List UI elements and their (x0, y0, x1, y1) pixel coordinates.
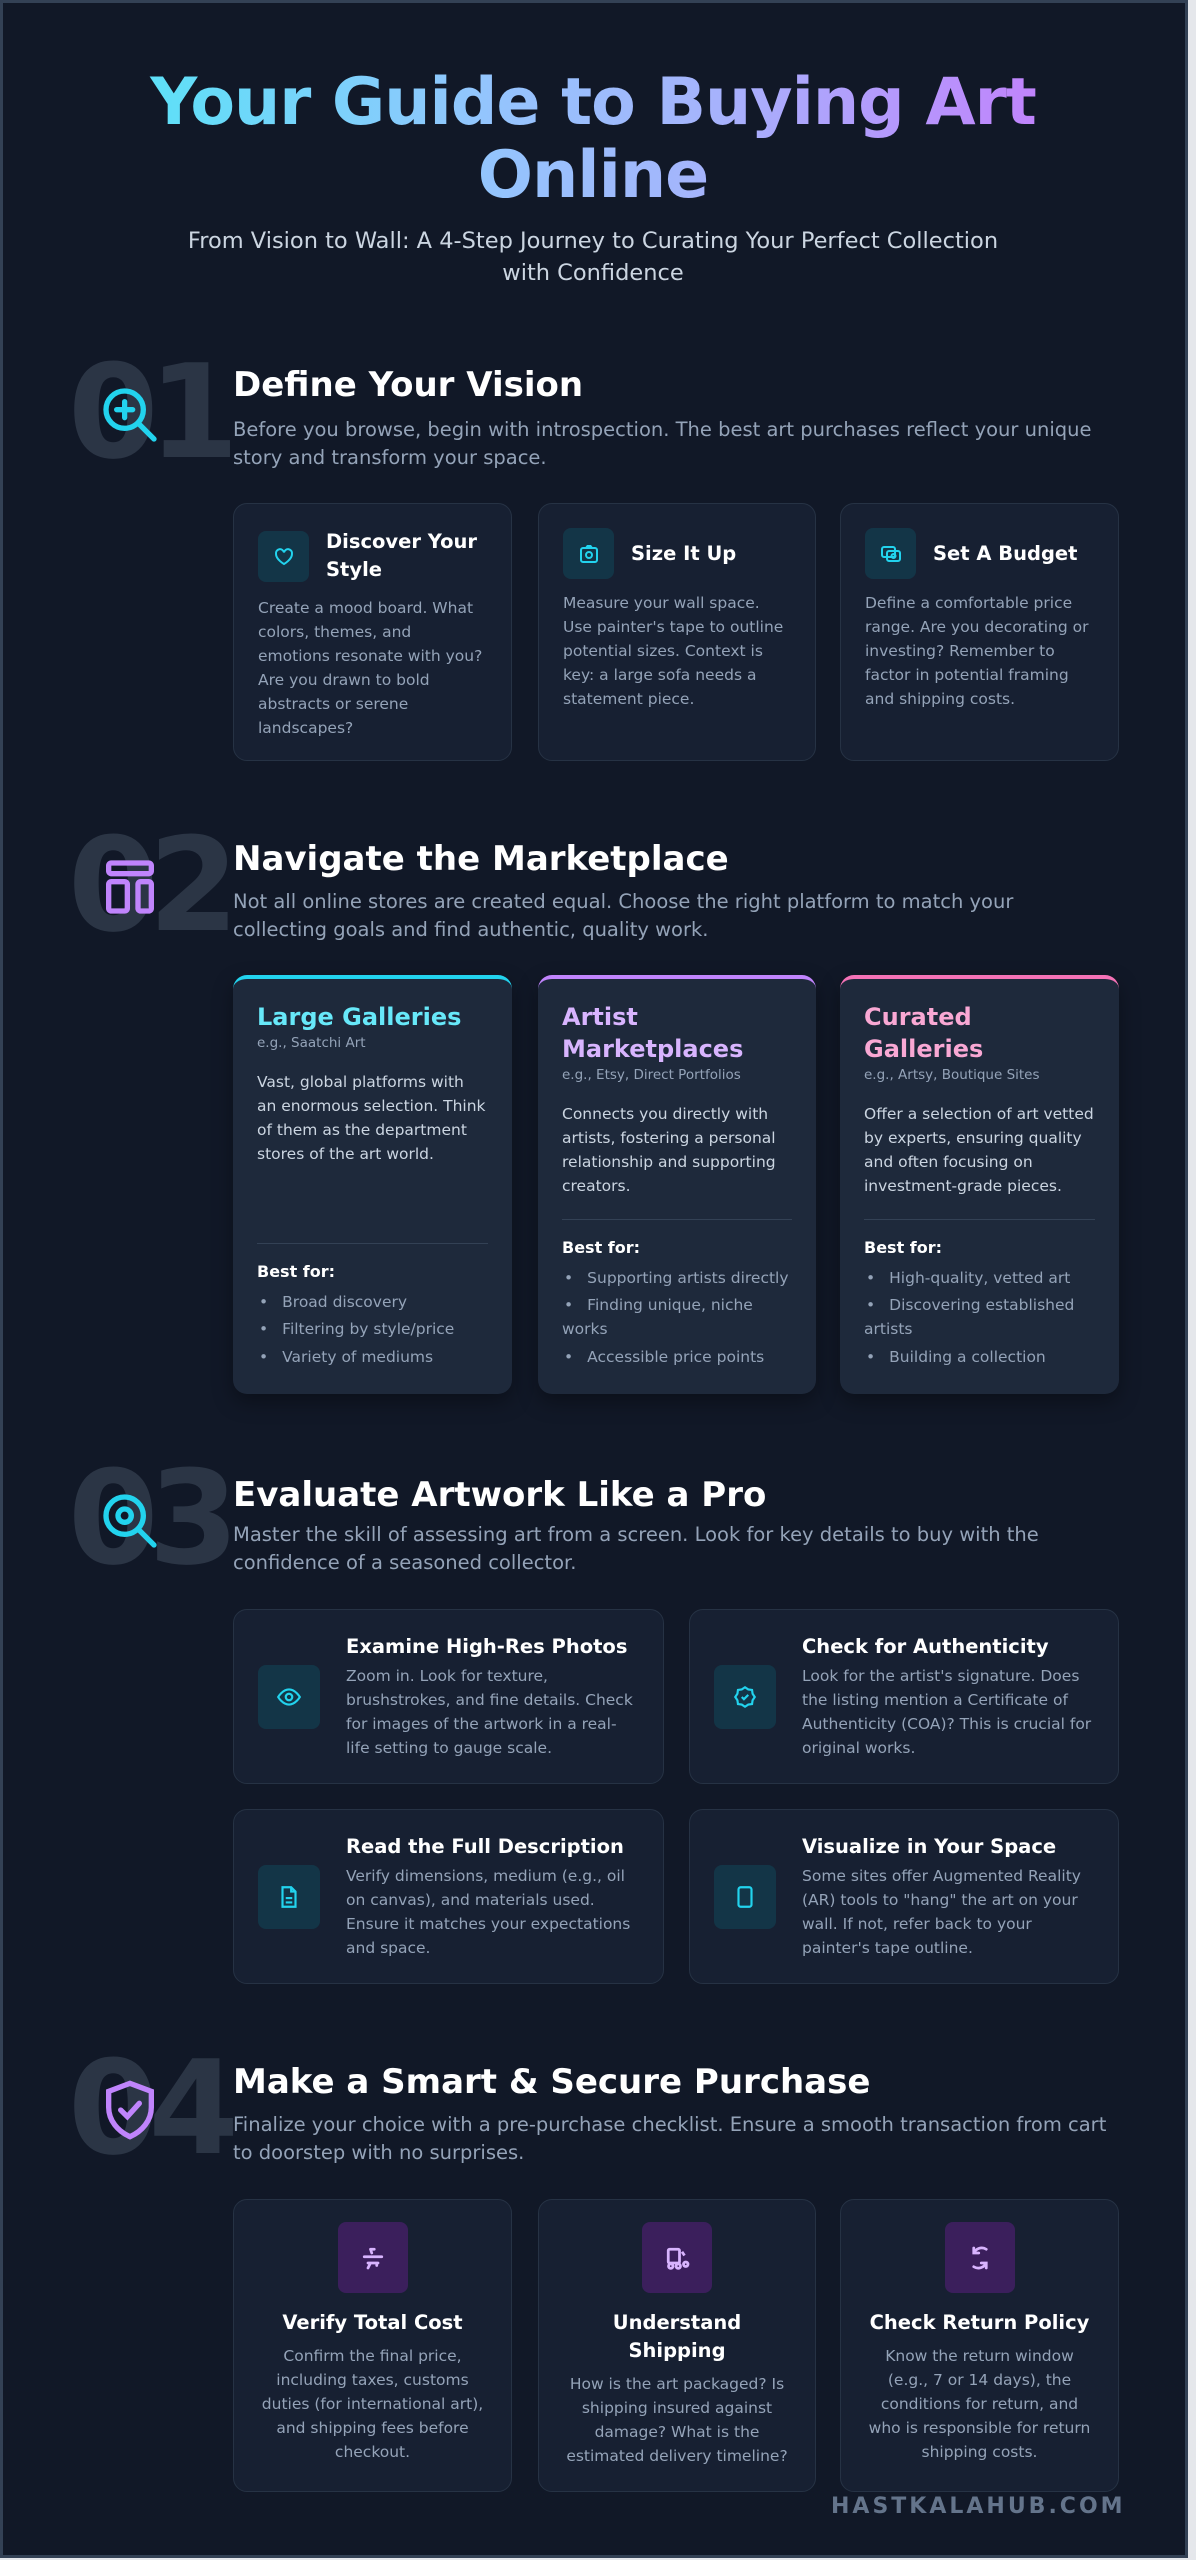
card: curated galleries: High-quality, vetted art (889, 1268, 1070, 1286)
heading: section 4: Make a Smart & Secure Purchase (233, 2062, 870, 2102)
subtitle: From Vision to Wall: A 4-Step Journey to Curating Your Perfect Collection (188, 228, 998, 254)
card: authenticity (689, 1609, 1119, 1784)
card: artist marketplaces: Artist Marketplaces (562, 1003, 743, 1063)
card: large galleries: Best for: (257, 1262, 335, 1280)
card: curated galleries: e.g., Artsy, Boutique Sites (864, 1067, 1040, 1083)
text: section 1 intro: Before you browse, begin with introspection. The best art purchases reflect your unique story and transform your space. (233, 418, 1092, 469)
card: curated galleries: Best for: (864, 1238, 942, 1256)
card: curated galleries: Curated Galleries (864, 1003, 983, 1063)
card: authenticity: Look for the artist's signature. Does the listing mention a Certificate of Authenticity (COA)? This is crucial for original works. (802, 1667, 1091, 1757)
card: large galleries: Filtering by style/price (282, 1320, 454, 1338)
card: return policy (840, 2199, 1119, 2492)
card: high-res photos: Examine High-Res Photos (346, 1635, 627, 1658)
text: section 3 intro: Master the skill of assessing art from a screen. Look for key details to buy with the confidence of a seasoned collector. (233, 1523, 1039, 1574)
card: full description: Read the Full Description (346, 1835, 624, 1858)
icon: search (103, 1494, 157, 1548)
icon: shield check (106, 2080, 154, 2140)
card: set a budget: Define a comfortable price range. Are you decorating or investing? Remember to factor in potential framing and shipping costs. (865, 594, 1089, 708)
text: section 2 intro: Not all online stores are created equal. Choose the right platform to match your collecting goals and find authentic, quality work. (233, 890, 1013, 941)
card: total cost (233, 2199, 512, 2492)
card: large galleries (233, 975, 512, 1394)
card: large galleries: Vast, global platforms with an enormous selection. Think of them as the department stores of the art world. (257, 1073, 486, 1163)
text: section 4 intro: Finalize your choice with a pre-purchase checklist. Ensure a smooth transaction from cart to doorstep with no surprises. (233, 2113, 1106, 2164)
card: artist marketplaces: e.g., Etsy, Direct Portfolios (562, 1067, 741, 1083)
card: authenticity: Check for Authenticity (802, 1635, 1049, 1658)
card: large galleries: e.g., Saatchi Art (257, 1035, 366, 1051)
card: size it up: Size It Up (631, 542, 736, 564)
card: full description: Verify dimensions, medium (e.g., oil on canvas), and materials used. Ensure it matches your expectations and space. (346, 1867, 630, 1957)
icon: zoom in (103, 388, 157, 442)
footer brand: HASTKALAHUB.COM (831, 2494, 1126, 2519)
card: visualize: Visualize in Your Space (802, 1835, 1056, 1858)
heading: section 1: Define Your Vision (233, 365, 583, 405)
card: set a budget (840, 503, 1119, 761)
card: visualize (689, 1809, 1119, 1984)
card: full description (233, 1809, 664, 1984)
subtitle (188, 228, 998, 286)
heading: section 2: Navigate the Marketplace (233, 839, 729, 879)
card: large galleries: Large Galleries (257, 1003, 461, 1031)
title: Your Guide to Buying Art Online (150, 65, 1036, 213)
icon: layout (106, 860, 154, 914)
section 3 number: 03 (68, 1442, 229, 1594)
card: total cost: Confirm the final price, including taxes, customs duties (for international art), and shipping fees before checkout. (262, 2347, 483, 2461)
card: high-res photos: Zoom in. Look for texture, brushstrokes, and fine details. Check for images of the artwork in a real-life setting to gauge scale. (346, 1667, 633, 1757)
card: artist marketplaces: Connects you directly with artists, fostering a personal relationship and supporting creators. (562, 1105, 776, 1195)
card: curated galleries (840, 975, 1119, 1394)
card: shipping: How is the art packaged? Is shipping insured against damage? What is the estimated delivery timeline? (566, 2375, 788, 2465)
card: discover your style (233, 503, 512, 761)
card: total cost: Verify Total Cost (282, 2311, 463, 2334)
card: curated galleries: Discovering established artists (864, 1296, 1074, 1338)
card: return policy: Know the return window (e.g., 7 or 14 days), the conditions for return, and who is responsible for return shipping costs. (869, 2347, 1090, 2461)
card: artist marketplaces: Accessible price points (587, 1348, 764, 1366)
card: discover your style: Discover Your Style (326, 530, 477, 581)
card: artist marketplaces: Finding unique, niche works (562, 1296, 753, 1338)
section 2 number: 02 (68, 809, 229, 961)
card: shipping: Shipping (628, 2339, 726, 2362)
card: high-res photos (233, 1609, 664, 1784)
card: size it up (538, 503, 816, 761)
card: artist marketplaces: Best for: (562, 1238, 640, 1256)
card: shipping (538, 2199, 816, 2492)
card: curated galleries: Building a collection (889, 1348, 1046, 1366)
card: artist marketplaces (538, 975, 816, 1394)
card: visualize: Some sites offer Augmented Reality (AR) tools to "hang" the art on your wall. If not, refer back to your painter's tape outline. (802, 1867, 1081, 1957)
card: discover your style: Create a mood board. What colors, themes, and emotions resonate with you? Are you drawn to bold abstracts or serene landscapes? (258, 599, 482, 737)
card: return policy: Check Return Policy (870, 2311, 1089, 2334)
card: large galleries: Variety of mediums (282, 1348, 433, 1366)
heading: section 3: Evaluate Artwork Like a Pro (233, 1475, 766, 1515)
section 1 number: 01 (68, 336, 229, 488)
card: large galleries: Broad discovery (282, 1292, 407, 1310)
card: artist marketplaces: Supporting artists directly (587, 1268, 789, 1286)
card: curated galleries: Offer a selection of art vetted by experts, ensuring quality and often focusing on investment-grade pieces. (864, 1105, 1094, 1195)
subtitle: with Confidence (502, 260, 684, 286)
card: size it up: Measure your wall space. Use painter's tape to outline potential sizes. Context is key: a large sofa needs a statement piece. (563, 594, 783, 708)
card: shipping: Understand (613, 2311, 741, 2334)
section 4 number: 04 (68, 2032, 229, 2184)
card: set a budget: Set A Budget (933, 542, 1077, 564)
